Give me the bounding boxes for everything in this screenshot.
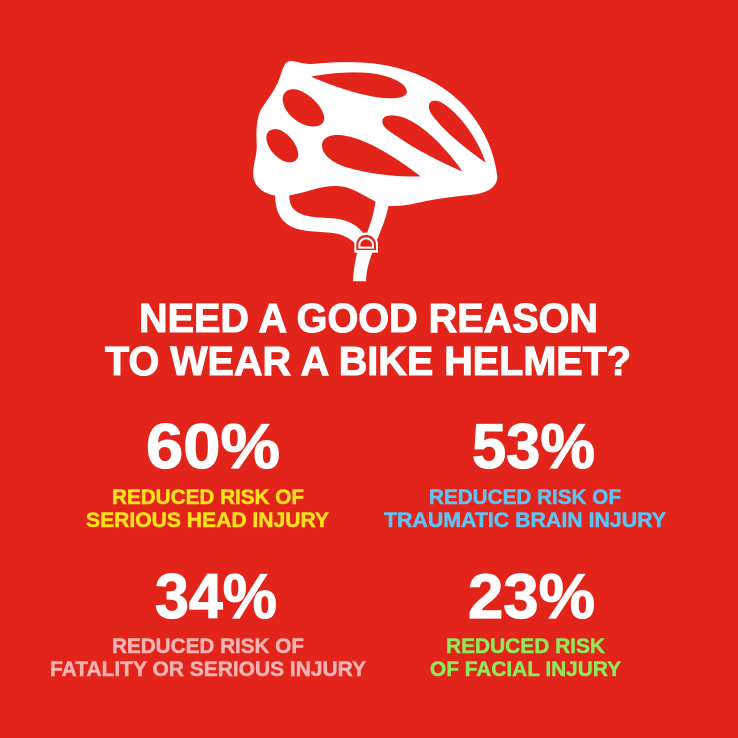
helmet side strap: [367, 200, 389, 239]
stat: 34% fatality or serious injury: REDUCED RISK OF: [112, 635, 304, 658]
title: TO WEAR A BIKE HELMET?: [105, 338, 631, 384]
title: NEED A GOOD REASON: [139, 295, 598, 341]
stat: 23% facial injury: OF FACIAL INJURY: [430, 658, 621, 681]
stat: 53% traumatic brain injury: [384, 412, 666, 532]
title: [105, 295, 631, 384]
stat: 60% serious head injury: REDUCED RISK OF: [112, 486, 304, 509]
stat: 23% facial injury: [430, 562, 621, 681]
stat: 53% traumatic brain injury: REDUCED RISK OF: [429, 486, 621, 509]
stat: 34% fatality or serious injury: 34%: [155, 562, 277, 632]
stat: 60% serious head injury: 60%: [146, 412, 280, 482]
stat: 23% facial injury: REDUCED RISK: [446, 635, 605, 658]
stat: 34% fatality or serious injury: FATALITY OR SERIOUS INJURY: [50, 658, 366, 681]
stat: 53% traumatic brain injury: 53%: [472, 412, 595, 482]
helmet shell: [253, 61, 497, 206]
helmet lower strap: [353, 252, 373, 281]
stat: 53% traumatic brain injury: TRAUMATIC BRAIN INJURY: [384, 509, 666, 532]
helmet strap: [275, 192, 364, 243]
helmet buckle: [354, 233, 378, 253]
stat: 23% facial injury: 23%: [468, 562, 595, 632]
stat: 60% serious head injury: [86, 412, 329, 532]
stat: 60% serious head injury: SERIOUS HEAD INJURY: [86, 509, 329, 532]
stat: 34% fatality or serious injury: [50, 562, 366, 681]
icon: bike helmet: [253, 61, 497, 281]
